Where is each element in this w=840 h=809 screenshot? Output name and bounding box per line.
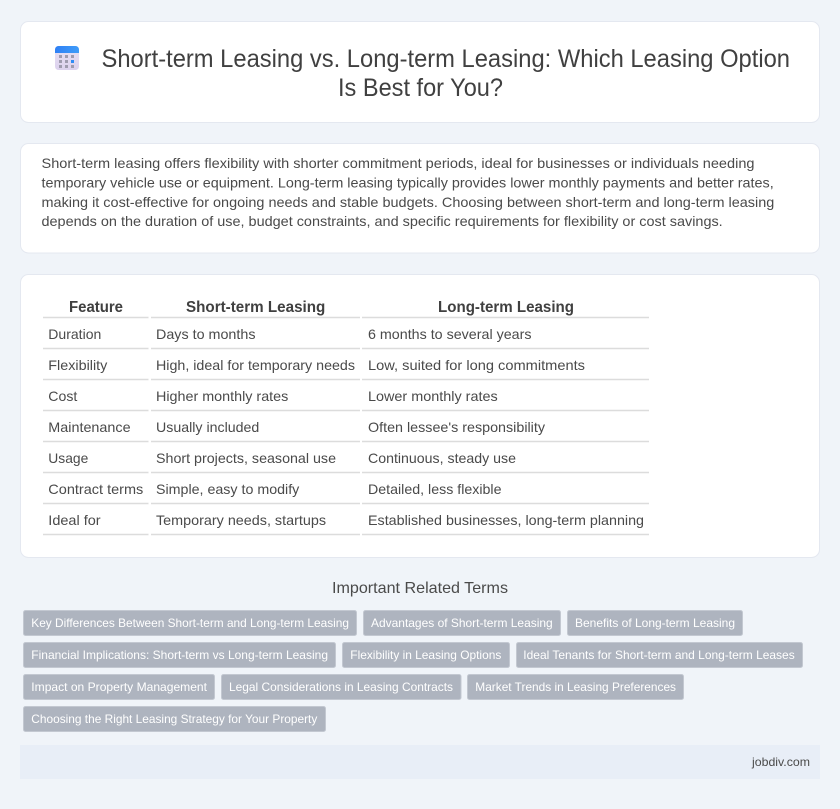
tag — [568, 610, 742, 636]
tag: Benefits of Long-term Leasing — [575, 616, 735, 630]
text block: summary: making it cost-effective for ongoing needs and stable budgets. Choosing between short-term and long-term leasing — [42, 194, 774, 210]
row: flexibility: Low, suited for long commitments — [368, 357, 585, 373]
tag — [24, 706, 326, 732]
tag: Impact on Property Management — [31, 680, 208, 694]
row: flexibility: High, ideal for temporary needs — [156, 357, 355, 373]
row: ideal for: Temporary needs, startups — [156, 512, 326, 528]
row: maintenance — [48, 419, 545, 435]
table header — [69, 299, 574, 316]
row: flexibility: Flexibility — [48, 357, 107, 373]
tag — [364, 610, 560, 636]
tag: Advantages of Short-term Leasing — [371, 616, 553, 630]
row: contract terms — [48, 481, 502, 497]
icon: calendar — [55, 46, 79, 70]
text block: summary: depends on the duration of use, budget constraints, and specific requirements for flexibility or cost savings. — [42, 213, 723, 229]
row: usage: Short projects, seasonal use — [156, 450, 336, 466]
footer — [20, 745, 820, 779]
heading: important related terms: Important Related Terms — [332, 580, 508, 597]
row: usage — [48, 450, 516, 466]
row: ideal for — [48, 512, 644, 528]
tag — [222, 674, 461, 700]
row: flexibility — [48, 357, 585, 373]
tag — [516, 642, 802, 668]
row: duration: Days to months — [156, 326, 256, 342]
row: contract terms: Detailed, less flexible — [368, 481, 502, 497]
row: cost: Lower monthly rates — [368, 388, 498, 404]
row: maintenance: Maintenance — [48, 419, 131, 435]
table header: Long-term Leasing — [438, 299, 574, 316]
tag — [468, 674, 684, 700]
text block: summary: temporary vehicle use or equipment. Long-term leasing typically provides lower monthly payments and better rates, — [42, 174, 774, 190]
tag: Choosing the Right Leasing Strategy for Your Property — [31, 712, 317, 726]
row: maintenance: Usually included — [156, 419, 259, 435]
panel: comparison table — [20, 274, 820, 558]
row: cost: Cost — [48, 388, 77, 404]
tag: Financial Implications: Short-term vs Long-term Leasing — [31, 648, 328, 662]
tag — [24, 674, 214, 700]
footer: jobdiv.com — [751, 755, 810, 769]
row: cost: Higher monthly rates — [156, 388, 288, 404]
row: maintenance: Often lessee's responsibility — [368, 419, 545, 435]
title — [102, 45, 790, 102]
row: ideal for: Established businesses, long-term planning — [368, 512, 644, 528]
tag: Flexibility in Leasing Options — [350, 648, 501, 662]
tag — [342, 642, 510, 668]
row: usage: Continuous, steady use — [368, 450, 516, 466]
panel: title header — [20, 22, 820, 122]
row: duration — [48, 326, 532, 342]
title: Is Best for You? — [338, 74, 503, 102]
row: contract terms: Contract terms — [48, 481, 143, 497]
row: duration: 6 months to several years — [368, 326, 532, 342]
row: duration: Duration — [48, 326, 101, 342]
title: Short-term Leasing vs. Long-term Leasing: Which Leasing Option — [102, 45, 790, 73]
tag: Legal Considerations in Leasing Contracts — [229, 680, 453, 694]
text block: summary: Short-term leasing offers flexibility with shorter commitment periods, ideal for businesses or individuals needing — [42, 155, 754, 171]
row: contract terms: Simple, easy to modify — [156, 481, 299, 497]
table header: Short-term Leasing — [186, 299, 325, 316]
tag: Key Differences Between Short-term and Long-term Leasing — [31, 616, 349, 630]
tag — [24, 610, 356, 636]
row: ideal for: Ideal for — [48, 512, 101, 528]
row: usage: Usage — [48, 450, 89, 466]
text block: summary — [42, 155, 774, 229]
panel: summary paragraph — [20, 144, 820, 253]
tag — [24, 642, 336, 668]
tag: Market Trends in Leasing Preferences — [475, 680, 676, 694]
row: cost — [48, 388, 498, 404]
table header: Feature — [69, 299, 123, 316]
tag: Ideal Tenants for Short-term and Long-term Leases — [523, 648, 795, 662]
panel: related term tags — [24, 610, 802, 732]
